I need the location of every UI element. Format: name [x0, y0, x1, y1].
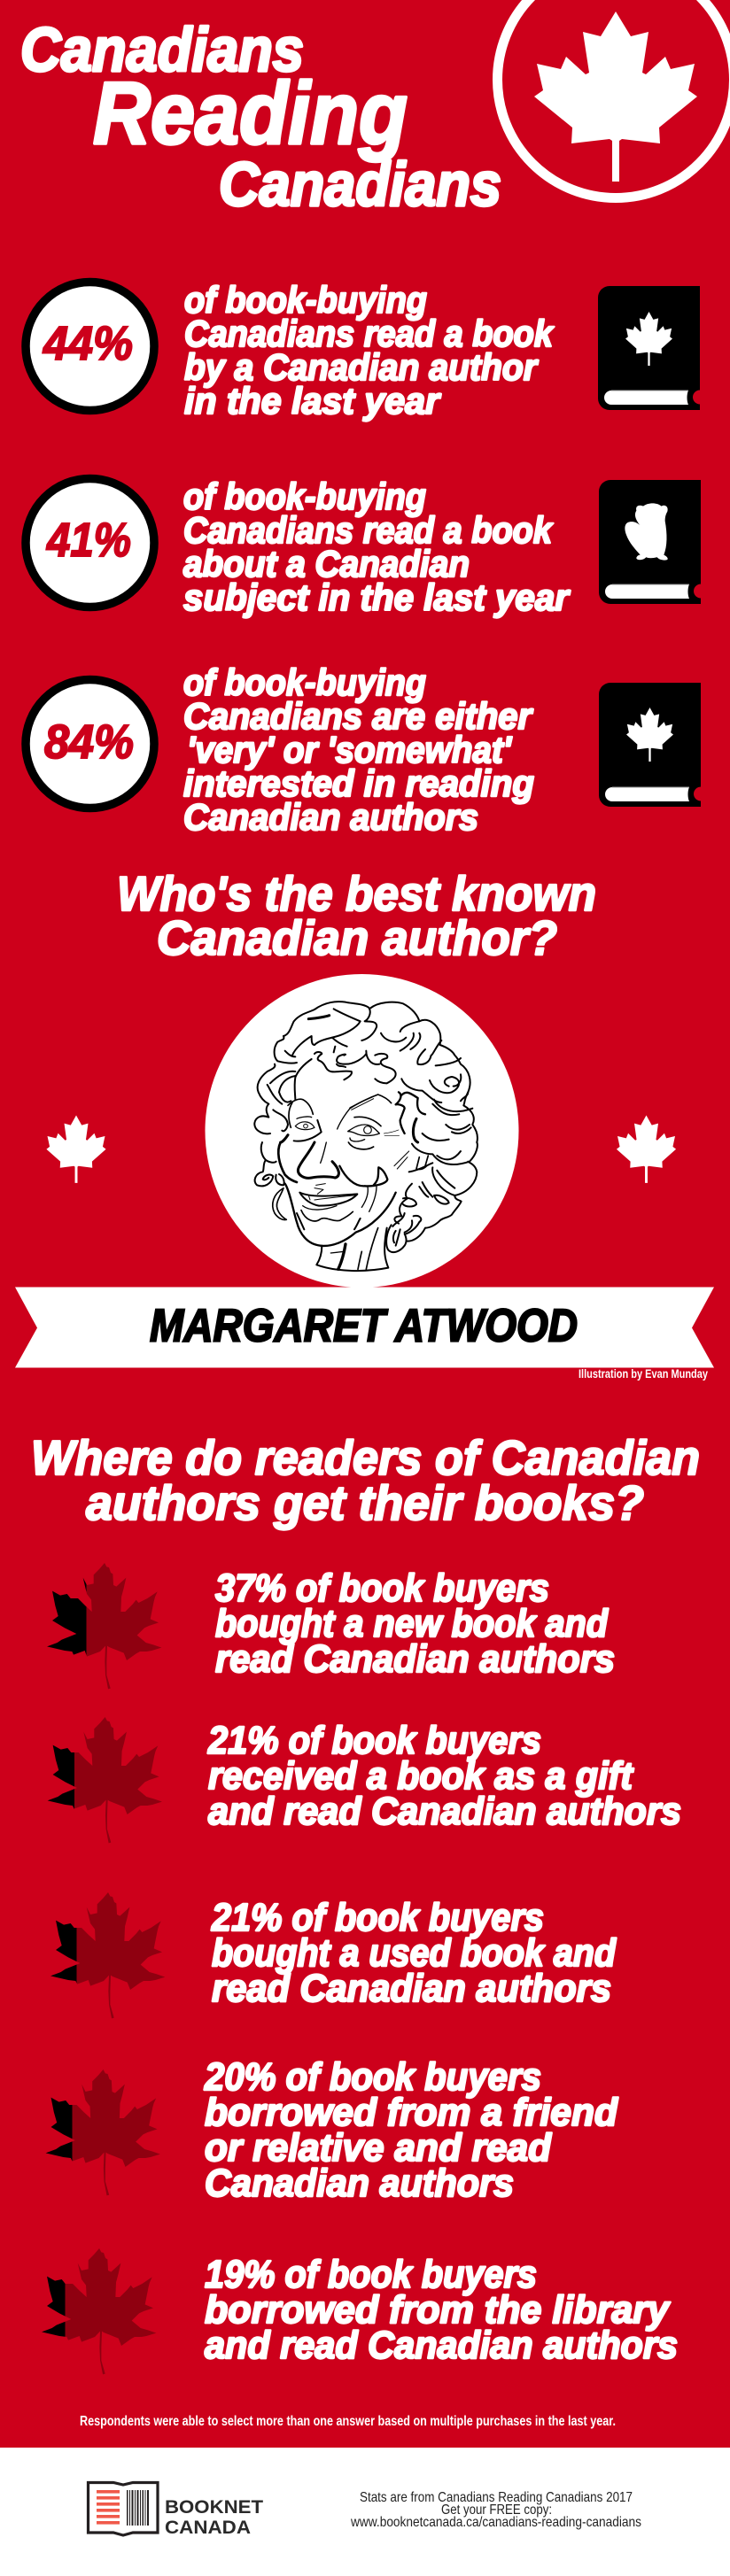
text block: 37%: 37% of book buyers [215, 1566, 549, 1610]
text block: 21% used: read Canadian authors [212, 1967, 611, 2010]
text block: 84% statement: interested in reading [183, 762, 534, 804]
panel: stat 41% [26, 476, 701, 618]
text block: 84% statement: Canadian authors [183, 796, 478, 838]
text block: 21% used [211, 1896, 617, 2010]
text block: source: Stats are from Canadians Reading Canadians 2017 [360, 2490, 633, 2505]
text block: 37% [215, 1566, 615, 1681]
text block: 20%: Canadian authors [205, 2162, 514, 2205]
text block: 44% statement: of book-buying [184, 279, 427, 321]
heading: best known author [117, 866, 596, 965]
portrait circle [206, 974, 519, 1288]
text block: 21% gift: and read Canadian authors [208, 1790, 681, 1833]
text block: 20%: 20% of book buyers [204, 2055, 541, 2099]
panel: 20% borrowed from friend [46, 2055, 618, 2205]
logo: BookNet Canada [89, 2483, 263, 2538]
icon: maple leaf roundel [498, 0, 730, 198]
icon: maple leaf 21% used [50, 1892, 165, 2018]
panel: stat 84% [26, 661, 701, 838]
illustration: Margaret Atwood caricature [254, 1002, 478, 1271]
panel: 37% new book [47, 1563, 615, 1689]
icon: maple leaf 20% [46, 2069, 160, 2195]
percentage badge 44% [26, 282, 154, 411]
text block: 20%: or relative and read [205, 2126, 552, 2170]
text block: 19%: 19% of book buyers [205, 2253, 537, 2296]
text block: 21% used: bought a used book and [212, 1931, 617, 1975]
heading: best known author: Canadian author? [157, 910, 557, 965]
percentage badge 41%: 41% [46, 514, 131, 567]
icon: book with maple leaf [598, 286, 700, 410]
title: Canadians [219, 150, 501, 219]
panel: 21% gift [48, 1717, 681, 1843]
text block: source: www.booknetcanada.ca/canadians-reading-canadians [350, 2515, 641, 2530]
icon: small maple leaf left [46, 1116, 106, 1183]
logo book mark [89, 2483, 158, 2535]
text block: source [350, 2490, 641, 2530]
text block: 19% [205, 2253, 678, 2367]
text block: 44% statement [184, 279, 555, 422]
text block: 19%: borrowed from the library [205, 2288, 671, 2332]
text block: 84% statement: 'very' or 'somewhat' [187, 729, 513, 770]
icon: maple leaf 37% [47, 1563, 161, 1689]
text block: 44% statement: Canadians read a book [184, 313, 555, 354]
text block: 41% statement [183, 476, 571, 618]
percentage badge 84% [26, 680, 154, 808]
title: Canadians [20, 15, 304, 84]
text block: 20%: borrowed from a friend [205, 2091, 618, 2134]
text block: 41% statement: subject in the last year [183, 576, 571, 618]
text block: 41% statement: of book-buying [183, 476, 426, 517]
heading: where readers get books [31, 1430, 700, 1530]
panel: 21% used book [50, 1892, 617, 2018]
percentage badge 41% [26, 478, 154, 607]
text block: source: Get your FREE copy: [441, 2503, 552, 2518]
icon: maple leaf 19% [42, 2248, 156, 2374]
icon: small maple leaf right [617, 1116, 676, 1183]
icon: book with maple leaf [599, 683, 701, 807]
banner: Margaret Atwood [15, 1288, 714, 1367]
panel: stat 44% [26, 279, 700, 422]
percentage badge 84%: 84% [44, 716, 134, 769]
text block: 41% statement: about a Canadian [183, 543, 470, 584]
heading: where readers get books: Where do readers of Canadian [31, 1430, 700, 1485]
panel: 19% library [42, 2248, 678, 2374]
icon: maple leaf 21% gift [48, 1717, 162, 1843]
text block: 37%: read Canadian authors [215, 1637, 615, 1681]
text block: 21% gift: 21% of book buyers [207, 1719, 541, 1762]
logo: BookNet Canada: BOOKNET [165, 2497, 263, 2518]
percentage badge 44%: 44% [43, 317, 133, 370]
title: Reading [93, 64, 408, 162]
text block: 21% gift: received a book as a gift [208, 1754, 634, 1798]
text block: 44% statement: in the last year [184, 380, 442, 422]
text block: 21% gift [207, 1719, 681, 1833]
banner: Margaret Atwood: MARGARET ATWOOD [150, 1300, 578, 1351]
text block: 37%: bought a new book and [215, 1602, 609, 1645]
footer panel [0, 2448, 730, 2576]
text block: 84% statement: of book-buying [183, 661, 426, 703]
text block: 21% used: 21% of book buyers [211, 1896, 544, 1939]
text block: 84% statement [183, 661, 534, 838]
heading: where readers get books: authors get their books? [86, 1475, 644, 1530]
heading: best known author: Who's the best known [117, 866, 596, 921]
logo: BookNet Canada: CANADA [165, 2518, 251, 2538]
title [20, 15, 501, 219]
text block: 44% statement: by a Canadian author [184, 346, 539, 388]
text block: 84% statement: Canadians are either [183, 695, 534, 737]
text block: 41% statement: Canadians read a book [183, 509, 554, 551]
icon: book with beaver [599, 480, 701, 604]
text block: 19%: and read Canadian authors [205, 2324, 678, 2367]
text block: 20% [204, 2055, 618, 2205]
